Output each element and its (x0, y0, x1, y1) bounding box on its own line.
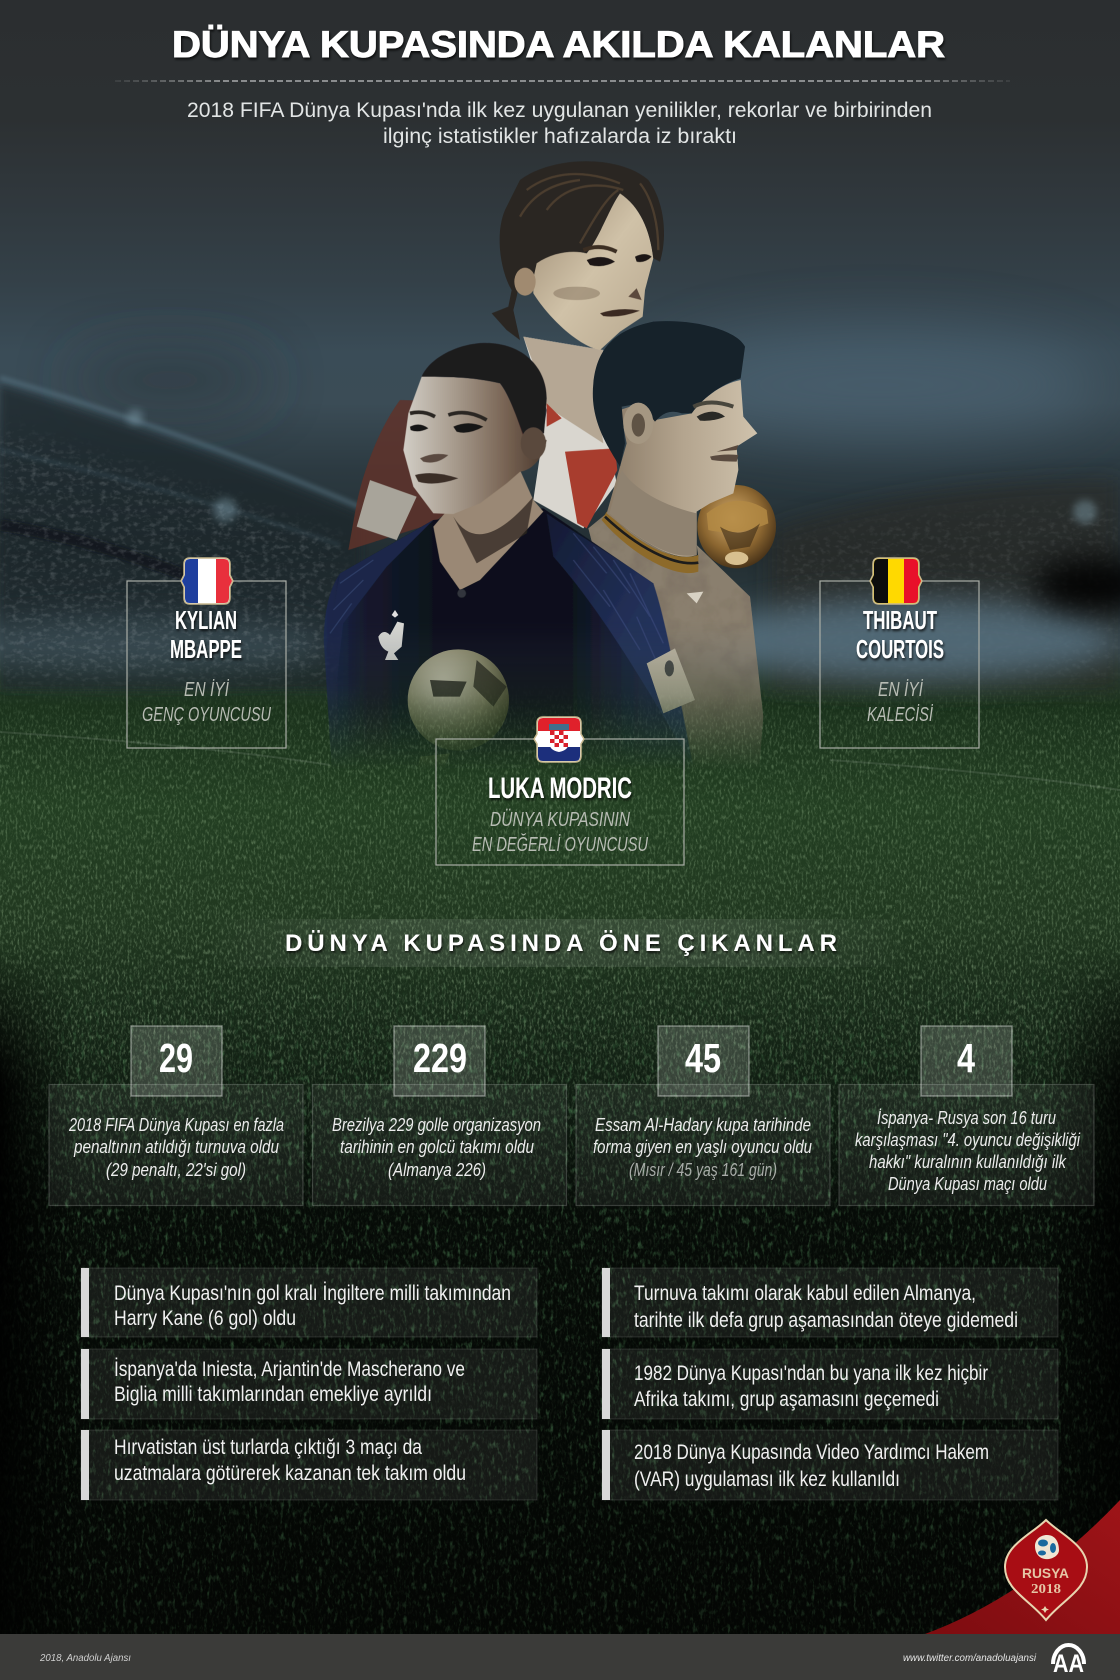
stat card: 45: forma giyen en yaşlı oyuncu oldu (593, 1137, 812, 1157)
ballon d'or trophy (697, 485, 776, 568)
icon: AA logo: AA (1053, 1650, 1084, 1678)
footer credit: 2018, Anadolu Ajansı (39, 1653, 131, 1664)
flag: Belgium (870, 558, 922, 604)
stat card: 45: 45 (685, 1035, 721, 1081)
stat card: 45 (576, 1026, 830, 1206)
stat card: 29: penaltının atıldığı turnuva oldu (73, 1137, 279, 1157)
fact: Germany: tarihte ilk defa grup aşamasından öteye gidemedi (634, 1308, 1018, 1332)
player: Kylian Mbappe (324, 342, 692, 762)
fact: Germany (602, 1268, 1058, 1337)
fact: Africa: Afrika takımı, grup aşamasını geçemedi (634, 1387, 939, 1411)
badge: Rusya 2018: 2018 (1031, 1582, 1061, 1597)
panel: Thibaut Courtois: KALECİSİ (867, 704, 933, 726)
stat card: 229: 229 (413, 1035, 467, 1081)
stat card: 229: tarihinin en golcü takımı oldu (340, 1137, 534, 1157)
fact: Harry Kane (81, 1268, 537, 1337)
section heading: highlights: DÜNYA KUPASINDA ÖNE ÇIKANLAR (285, 930, 837, 957)
panel: Kylian Mbappe: MBAPPE (170, 634, 242, 664)
fact: Harry Kane: Harry Kane (6 gol) oldu (114, 1306, 296, 1330)
title: DÜNYA KUPASINDA AKILDA KALANLAR (172, 24, 945, 65)
golden ball (408, 649, 509, 762)
fact: Croatia extra time (81, 1430, 537, 1500)
fact: retirements (81, 1349, 537, 1419)
red corner (925, 1500, 1120, 1634)
fact: retirements: Biglia milli takımlarından emekliye ayrıldı (114, 1382, 432, 1406)
subtitle: 2018 FIFA Dünya Kupası'nda ilk kez uygulanan yenilikler, rekorlar ve birbirinden (187, 99, 932, 122)
stat card: 4: hakkı" kuralının kullanıldığı ilk (869, 1152, 1067, 1172)
stat card: 229: Brezilya 229 golle organizasyon (332, 1115, 541, 1135)
subtitle (187, 99, 932, 148)
players photo group (324, 161, 776, 760)
stat card: 4: İspanya- Rusya son 16 turu (877, 1108, 1056, 1128)
fact: VAR: 2018 Dünya Kupasında Video Yardımcı Hakem (634, 1440, 989, 1464)
panel: Kylian Mbappe (127, 558, 286, 748)
stat card: 29: 2018 FIFA Dünya Kupası en fazla (68, 1115, 284, 1135)
panel: Luka Modric: LUKA MODRIC (488, 772, 632, 805)
player: Thibaut Courtois (588, 321, 764, 760)
fact: Africa: 1982 Dünya Kupası'ndan bu yana ilk kez hiçbir (634, 1361, 988, 1385)
flag: France (181, 558, 233, 604)
stat card: 45: (Mısır / 45 yaş 161 gün) (629, 1160, 777, 1180)
dashed divider line (115, 80, 1010, 82)
stat card: 29 (49, 1026, 303, 1206)
fact: Africa (602, 1349, 1058, 1419)
panel: Thibaut Courtois: COURTOIS (856, 634, 944, 664)
stat card: 229 (312, 1026, 566, 1206)
stat card: 4: Dünya Kupası maçı oldu (888, 1174, 1047, 1194)
flag: Croatia (534, 717, 584, 762)
panel: Kylian Mbappe: KYLIAN (175, 605, 237, 635)
world cup patch and crest (378, 610, 695, 713)
badge: Rusya 2018 (1005, 1520, 1087, 1620)
panel: Thibaut Courtois: THIBAUT (863, 605, 937, 635)
stat card: 4: 4 (957, 1035, 975, 1081)
player: Luka Modric (348, 161, 664, 550)
fact: Harry Kane: Dünya Kupası'nın gol kralı İngiltere milli takımından (114, 1281, 511, 1305)
subtitle: ilginç istatistikler hafızalarda iz bıraktı (383, 125, 737, 148)
fact: retirements: İspanya'da Iniesta, Arjantin'de Mascherano ve (114, 1357, 465, 1381)
badge: Rusya 2018: RUSYA (1022, 1565, 1069, 1581)
stat card: 4 (839, 1026, 1094, 1206)
stat card: 29: 29 (159, 1035, 193, 1081)
fact: Croatia extra time: uzatmalara götürerek kazanan tek takım oldu (114, 1461, 466, 1485)
panel: Kylian Mbappe: EN İYİ (184, 679, 229, 701)
fact: VAR (602, 1430, 1058, 1500)
panel: Luka Modric: DÜNYA KUPASININ (490, 809, 630, 831)
stat card: 229: (Almanya 226) (388, 1160, 486, 1180)
panel: Thibaut Courtois (820, 558, 979, 748)
panel: Luka Modric: EN DEĞERLİ OYUNCUSU (472, 833, 648, 856)
panel: Thibaut Courtois: EN İYİ (878, 679, 923, 701)
panel: Kylian Mbappe: GENÇ OYUNCUSU (142, 704, 271, 726)
footer bar (0, 1634, 1120, 1680)
stat card: 45: Essam Al-Hadary kupa tarihinde (595, 1115, 811, 1135)
fact: Germany: Turnuva takımı olarak kabul edilen Almanya, (634, 1281, 976, 1305)
section heading: highlights (200, 919, 920, 967)
footer url: www.twitter.com/anadoluajansi (903, 1653, 1037, 1664)
fact: Croatia extra time: Hırvatistan üst turlarda çıktığı 3 maçı da (114, 1435, 422, 1459)
fact: VAR: (VAR) uygulaması ilk kez kullanıldı (634, 1467, 900, 1491)
panel: Luka Modric (436, 717, 684, 865)
icon: world cup emblem (1035, 1535, 1059, 1559)
stat card: 29: (29 penaltı, 22'si gol) (106, 1160, 246, 1180)
